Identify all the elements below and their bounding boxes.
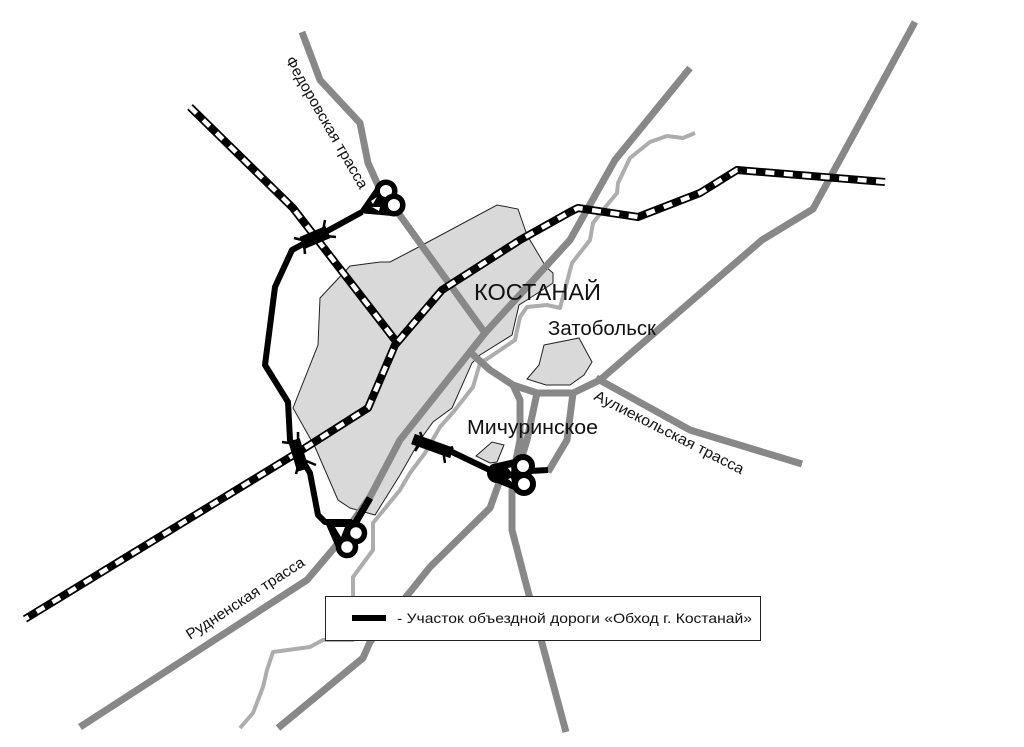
legend text: - Участок объездной дороги «Обход г. Костанай»	[397, 610, 752, 626]
road: branch to Michurinskoe	[512, 385, 520, 480]
label: Michurinskoe: Мичуринское	[467, 417, 598, 439]
area: Zatobolsk	[527, 338, 592, 385]
road: branch to interchange	[548, 393, 573, 472]
label: Zatobolsk: Затобольск	[548, 318, 656, 340]
bridge: west crossing	[282, 432, 316, 474]
railways	[25, 107, 885, 619]
road: southern highway	[512, 393, 566, 732]
railway: northwest branch	[190, 107, 395, 340]
label: Fedorovskaya highway: Федоровская трасса	[282, 54, 372, 192]
interchange: southwest	[324, 520, 364, 556]
road: main diagonal, Rudnenskaya highway	[80, 68, 690, 727]
interchange: north	[358, 182, 403, 216]
interchange: southeast	[487, 457, 533, 494]
city area: Kostanay	[293, 205, 553, 515]
area: Michurinskoe	[476, 442, 504, 463]
label: Kostanay: КОСТАНАЙ	[474, 278, 601, 305]
road: southwestern road	[278, 480, 500, 728]
river	[240, 133, 695, 728]
railway: main line	[25, 170, 885, 619]
bridge: southeast crossing	[413, 432, 453, 463]
label: Rudnenskaya highway: Рудненская трасса	[183, 554, 308, 643]
bridge: north crossing	[294, 220, 336, 254]
road: Fedorovskaya highway and eastern road	[302, 22, 915, 393]
road: Auliekolskaya highway	[596, 378, 802, 464]
legend swatch	[352, 615, 386, 621]
grey roads	[80, 22, 915, 732]
bypass road	[265, 212, 548, 527]
legend	[326, 596, 760, 640]
label: Auliekolskaya highway: Аулиекольская трасса	[591, 387, 747, 478]
